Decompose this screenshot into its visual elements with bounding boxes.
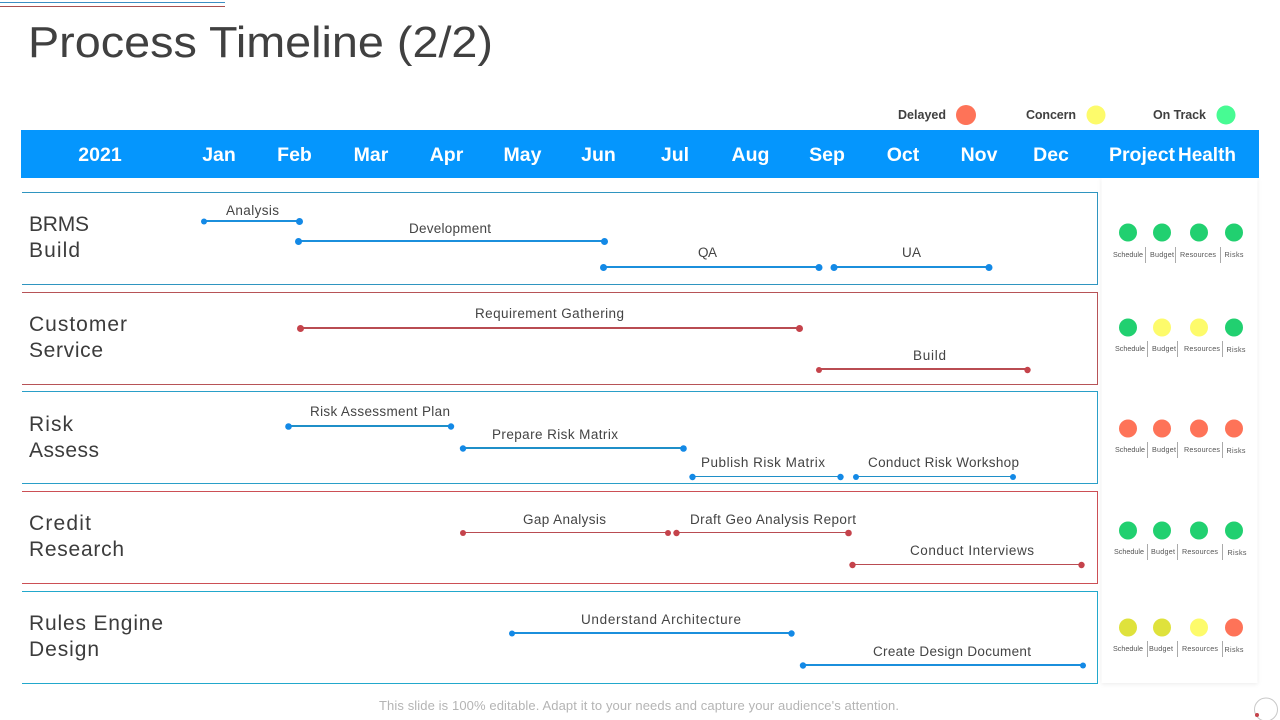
task: Conduct Risk Workshop: Conduct Risk Workshop: [868, 455, 1019, 470]
task: QA: QA: [698, 245, 717, 260]
task: Conduct Interviews: [849, 543, 1085, 568]
task: Conduct Interviews: Conduct Interviews: [910, 543, 1034, 558]
task: Requirement Gathering: [297, 306, 803, 332]
row: Rules Engine Design: Design: [29, 638, 99, 661]
health: Credit Research: Budget: [1151, 547, 1175, 556]
health: Risk Assess: Resources: [1184, 445, 1220, 454]
task: Publish Risk Matrix: Publish Risk Matrix: [701, 455, 825, 470]
footer note: This slide is 100% editable. Adapt it to your needs and capture your audience's attention.: [379, 698, 899, 713]
task: UA: [830, 245, 992, 271]
task: Draft Geo Analysis Report: [673, 512, 856, 536]
health: Credit Research: [1114, 522, 1247, 560]
task: Understand Architecture: [509, 612, 795, 637]
task: Build: Build: [913, 348, 946, 363]
row: Credit Research: [22, 492, 1098, 584]
task: Gap Analysis: Gap Analysis: [523, 512, 606, 527]
header bar: Health: [1178, 144, 1236, 166]
health: Customer Service: Risks: [1226, 345, 1246, 354]
health: BRMS Build: Resources: [1180, 250, 1216, 259]
task: Requirement Gathering: Requirement Gathering: [475, 306, 624, 321]
legend: On Track: [1153, 108, 1206, 122]
legend: Delayed: [898, 108, 946, 122]
health: Rules Engine Design: Risks: [1224, 645, 1244, 654]
health: Customer Service: Budget: [1152, 344, 1176, 353]
row: BRMS Build: Build: [29, 239, 80, 262]
header bar: Sep: [809, 144, 845, 166]
header bar: Mar: [354, 144, 389, 166]
legend: [898, 105, 1236, 125]
health: BRMS Build: Risks: [1224, 250, 1244, 259]
header bar: Feb: [277, 144, 312, 166]
task: Conduct Risk Workshop: [853, 455, 1019, 480]
health: BRMS Build: Budget: [1150, 250, 1174, 259]
row: Risk Assess: Risk: [29, 413, 74, 436]
health: Credit Research: Risks: [1228, 548, 1247, 557]
task: Create Design Document: [800, 644, 1086, 669]
header bar: 2021: [78, 144, 122, 166]
health: BRMS Build: Schedule: [1113, 250, 1143, 259]
title: Process Timeline (2/2): [28, 18, 493, 67]
health: Risk Assess: [1115, 420, 1246, 458]
row: Rules Engine Design: Rules Engine: [29, 612, 163, 635]
row: BRMS Build: [22, 192, 1098, 284]
task: Risk Assessment Plan: Risk Assessment Plan: [310, 404, 450, 419]
header bar: Aug: [732, 144, 769, 166]
task: Create Design Document: Create Design Document: [873, 644, 1031, 659]
row: Rules Engine Design: [22, 592, 1098, 684]
row: Credit Research: Research: [29, 538, 124, 561]
legend: Concern: [1026, 108, 1076, 122]
project health panel: [1102, 178, 1258, 683]
health: Credit Research: Resources: [1182, 547, 1218, 556]
task: Development: [295, 221, 608, 245]
health: Rules Engine Design: Resources: [1182, 644, 1218, 653]
header bar: Jul: [661, 144, 689, 166]
health: Rules Engine Design: Schedule: [1113, 644, 1143, 653]
task: Understand Architecture: Understand Architecture: [581, 612, 741, 627]
task: Build: [816, 348, 1031, 373]
row: Risk Assess: [22, 392, 1098, 484]
header bar: Dec: [1033, 144, 1069, 166]
task: UA: UA: [902, 245, 921, 260]
health: Rules Engine Design: Budget: [1149, 644, 1173, 653]
row: BRMS Build: BRMS: [29, 213, 89, 236]
row: Customer Service: Customer: [29, 313, 127, 336]
health: Risk Assess: Budget: [1152, 445, 1176, 454]
health: Risk Assess: Risks: [1226, 446, 1246, 455]
health: BRMS Build: [1113, 224, 1244, 263]
health: Credit Research: Schedule: [1114, 547, 1144, 556]
task: QA: [600, 245, 822, 271]
task: Analysis: Analysis: [226, 203, 279, 218]
row: Customer Service: Service: [29, 339, 103, 362]
header bar: Jun: [581, 144, 616, 166]
task: Publish Risk Matrix: [689, 455, 844, 480]
row: Credit Research: Credit: [29, 512, 91, 535]
header bar: Apr: [430, 144, 464, 166]
header bar: May: [504, 144, 542, 166]
header bar: Oct: [887, 144, 920, 166]
header bar: [21, 130, 1259, 178]
task: Prepare Risk Matrix: Prepare Risk Matrix: [492, 427, 618, 442]
health: Risk Assess: Schedule: [1115, 445, 1145, 454]
header bar: Jan: [202, 144, 236, 166]
row: Risk Assess: Assess: [29, 439, 99, 462]
corner icon: [1254, 698, 1278, 720]
task: Analysis: [201, 203, 303, 225]
task: Gap Analysis: [460, 512, 671, 536]
header bar: Nov: [961, 144, 998, 166]
row: Customer Service: [22, 292, 1098, 384]
header bar: Project: [1109, 144, 1176, 166]
health: Customer Service: [1115, 318, 1246, 357]
task: Development: Development: [409, 221, 491, 236]
health: Customer Service: Schedule: [1115, 344, 1145, 353]
task: Prepare Risk Matrix: [460, 427, 687, 452]
task: Risk Assessment Plan: [285, 404, 454, 430]
health: Customer Service: Resources: [1184, 344, 1220, 353]
health: Rules Engine Design: [1113, 618, 1244, 657]
task: Draft Geo Analysis Report: Draft Geo Analysis Report: [690, 512, 856, 527]
